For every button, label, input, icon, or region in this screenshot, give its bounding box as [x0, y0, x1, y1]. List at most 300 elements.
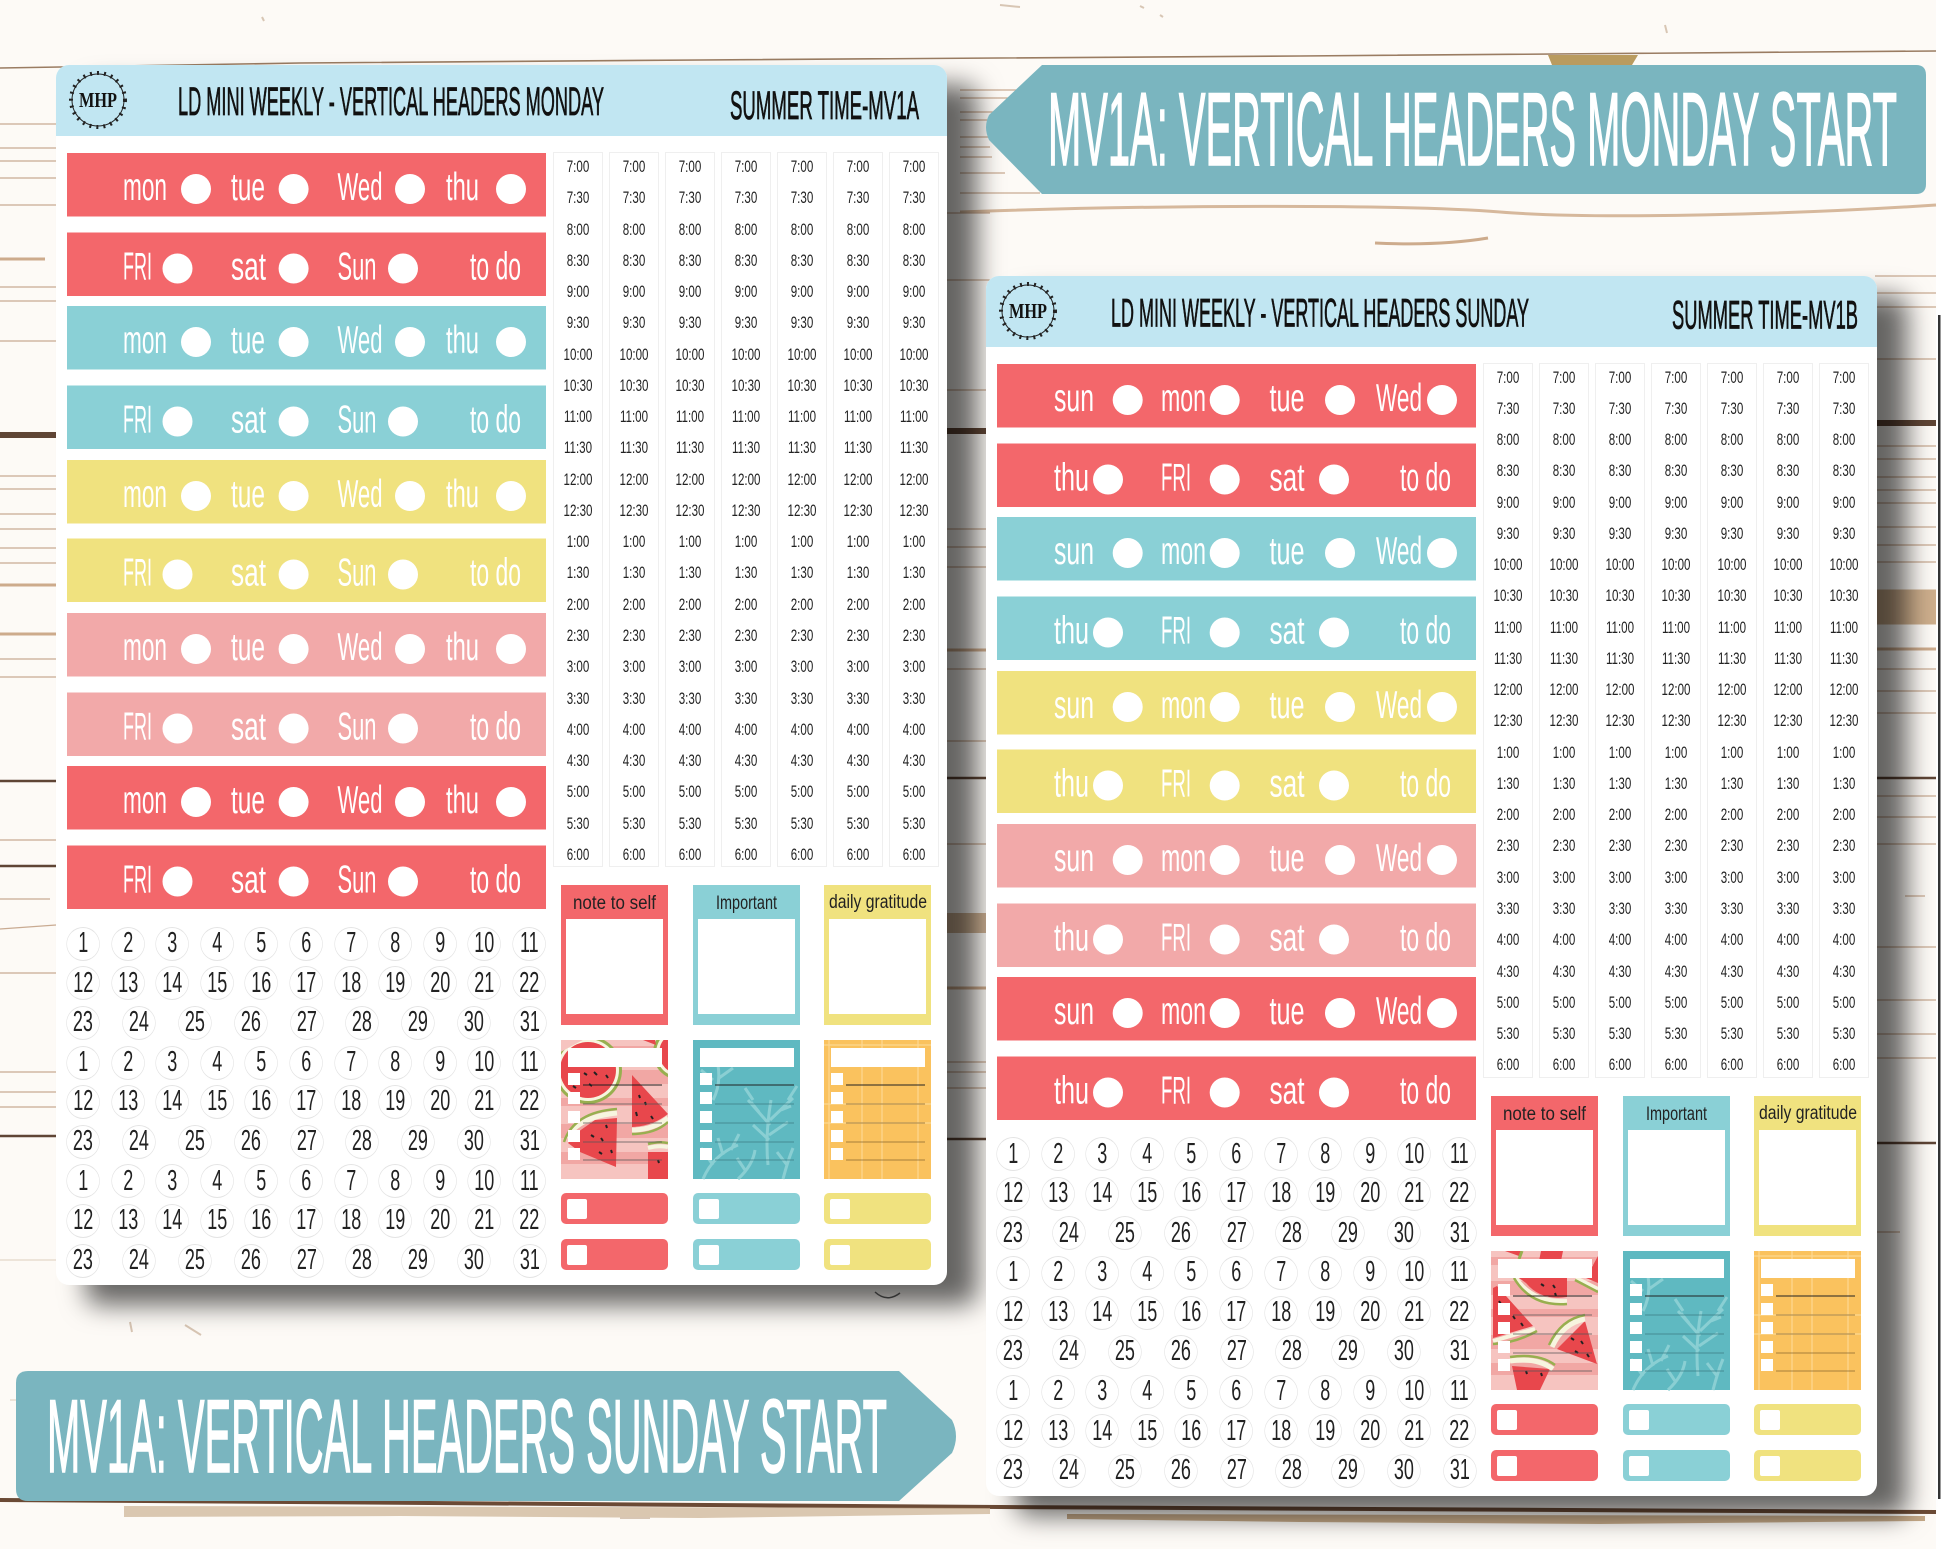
- time column 5: 11:00: [788, 407, 816, 426]
- time column 1: 11:30: [1494, 649, 1522, 668]
- time column 5: 5:30: [791, 814, 813, 833]
- small curved mark under sheet: [875, 1292, 900, 1298]
- time column 3: 9:00: [679, 282, 701, 301]
- date number stickers: 26: [1171, 1335, 1191, 1367]
- time column 3: 7:00: [679, 157, 701, 176]
- date number stickers: 11: [520, 1046, 539, 1078]
- date number stickers: 20: [1360, 1177, 1380, 1209]
- date number stickers: 13: [118, 1085, 138, 1117]
- time column 4: 7:00: [1665, 368, 1687, 386]
- time column 2: 8:30: [1553, 461, 1575, 480]
- time column 1: 8:00: [567, 220, 589, 239]
- time column 7: 9:00: [903, 282, 925, 301]
- time column 5: 7:30: [791, 188, 813, 207]
- time column 1: 7:00: [1497, 368, 1519, 386]
- day bar 4 teal: sat: [231, 398, 266, 442]
- date number stickers: 3: [1097, 1375, 1107, 1407]
- time column 2: 2:00: [1553, 805, 1575, 824]
- time column 1: 5:00: [1497, 993, 1519, 1012]
- time column 6: 10:30: [844, 376, 872, 395]
- date number stickers: 13: [1048, 1296, 1068, 1328]
- time column 3: 8:30: [1609, 461, 1631, 480]
- time column 2: 10:30: [1550, 586, 1578, 605]
- time column 4: 10:30: [732, 376, 760, 395]
- day bar 5 yellow: [67, 460, 546, 524]
- day bar 10 red: thu: [1054, 1069, 1089, 1112]
- time column 7: 3:00: [903, 657, 925, 676]
- date number stickers: 28: [1282, 1335, 1302, 1367]
- time column 7: 1:00: [1833, 743, 1855, 762]
- checklist: teal coral pattern: [1623, 1250, 1730, 1390]
- time column 6: 3:30: [1777, 899, 1799, 918]
- time column 1: 9:00: [567, 282, 589, 301]
- time column 4: 1:30: [1665, 774, 1687, 793]
- time column 1: [553, 152, 603, 867]
- time column 2: 4:00: [623, 720, 645, 739]
- date number stickers: 12: [73, 1204, 93, 1236]
- time column 6: 3:00: [847, 657, 869, 676]
- date number stickers: 17: [1226, 1177, 1246, 1209]
- date number stickers: 4: [212, 1165, 222, 1197]
- time column 7: 6:00: [903, 845, 925, 864]
- time column 7: 12:30: [1830, 711, 1858, 730]
- note box: daily gratitude: [824, 885, 931, 1025]
- time column 6: 7:30: [847, 188, 869, 207]
- day bar 9 red: Wed: [1376, 990, 1422, 1032]
- time column 2: 3:30: [1553, 899, 1575, 918]
- date number stickers: 17: [1226, 1296, 1246, 1328]
- date number stickers: 2: [1053, 1138, 1063, 1170]
- tag stickers row 2: [561, 1239, 931, 1270]
- date number stickers: 14: [1092, 1296, 1112, 1328]
- date number stickers: 29: [1338, 1217, 1358, 1249]
- day bar 7 pink: sun: [1054, 836, 1094, 880]
- time column 6: 2:30: [847, 626, 869, 645]
- time column 4: 3:30: [735, 689, 757, 708]
- date number stickers: 17: [1226, 1415, 1246, 1447]
- time column 7: 8:00: [903, 220, 925, 239]
- day bar 1 red: mon: [123, 166, 167, 209]
- date number stickers: 14: [162, 1085, 182, 1117]
- date number stickers: 3: [1097, 1138, 1107, 1170]
- time column 1: 12:00: [1494, 680, 1522, 699]
- note box: daily gratitude: daily gratitude: [829, 892, 927, 913]
- time column 3: 2:30: [679, 626, 701, 645]
- time column 6: 1:30: [1777, 774, 1799, 793]
- date number stickers: 18: [1271, 1415, 1291, 1447]
- day bar 10 red: [997, 1056, 1476, 1120]
- date number stickers: 15: [1137, 1296, 1157, 1328]
- date number stickers: 20: [430, 967, 450, 999]
- time column 6: 4:00: [847, 720, 869, 739]
- date number stickers: 23: [1003, 1454, 1023, 1486]
- day bar 10 red: [67, 846, 546, 909]
- day bar 4 teal: Sun: [338, 398, 376, 442]
- date number stickers: 18: [341, 1085, 361, 1117]
- date number stickers: 19: [385, 1085, 405, 1117]
- date number stickers: 14: [1092, 1177, 1112, 1209]
- time column 2: 8:00: [1553, 430, 1575, 449]
- time column 4: 12:30: [732, 501, 760, 520]
- date number stickers: 5: [257, 927, 267, 959]
- time column 7: 3:30: [1833, 899, 1855, 918]
- date number stickers: 3: [167, 1165, 177, 1197]
- day bar 4 teal: to do: [1400, 609, 1451, 652]
- time column 2: 9:30: [623, 313, 645, 332]
- date number stickers: 26: [1171, 1217, 1191, 1249]
- date number stickers: 22: [1449, 1415, 1469, 1447]
- time column 1: 7:00: [567, 157, 589, 176]
- date number stickers: 7: [346, 1046, 356, 1078]
- time column 3: 5:30: [1609, 1024, 1631, 1043]
- day bar 6 yellow: to do: [470, 552, 521, 594]
- time column 4: 5:00: [1665, 993, 1687, 1012]
- time column 2: 10:00: [1550, 555, 1578, 574]
- day bar 8 pink: FRI: [1161, 916, 1191, 959]
- time column 5: 10:00: [788, 345, 816, 364]
- time column 6: 1:00: [847, 532, 869, 551]
- day bar 7 pink: [997, 824, 1476, 887]
- time column 5: 2:30: [791, 626, 813, 645]
- date number stickers: 31: [1450, 1335, 1470, 1367]
- day bar 3 teal: Wed: [338, 319, 382, 362]
- time column 4: 6:00: [735, 845, 757, 864]
- date number stickers: 18: [1271, 1177, 1291, 1209]
- date number stickers: 18: [1271, 1296, 1291, 1328]
- day bar 8 pink: sat: [1270, 916, 1305, 959]
- time column 5: 9:30: [1721, 524, 1743, 543]
- date number stickers: 19: [385, 967, 405, 999]
- time column 5: 3:00: [1721, 868, 1743, 887]
- day bar 2 red: [67, 232, 546, 296]
- date number stickers: 14: [162, 967, 182, 999]
- day bar 1 red: tue: [1270, 376, 1304, 420]
- time column 2: 11:30: [620, 438, 648, 457]
- time column 4: 4:30: [1665, 962, 1687, 981]
- date number stickers: 2: [123, 927, 133, 959]
- note box: important: Important: [1646, 1104, 1708, 1124]
- day bar 5 yellow: thu: [446, 473, 479, 516]
- time column 4: 10:30: [1662, 586, 1690, 605]
- time column 5: 2:00: [1721, 805, 1743, 824]
- date number stickers: 21: [475, 967, 495, 999]
- date number stickers: 9: [1365, 1375, 1375, 1407]
- date number stickers: 25: [185, 1006, 205, 1038]
- time column 3: 12:00: [676, 470, 704, 489]
- time column 7: 2:30: [903, 626, 925, 645]
- day bar 6 yellow: [67, 538, 546, 602]
- time column 7: 12:00: [1830, 680, 1858, 699]
- time column 1: 1:00: [1497, 743, 1519, 762]
- time column 4: 10:00: [1662, 555, 1690, 574]
- time column 5: 7:30: [1721, 399, 1743, 418]
- day bar 5 yellow: sun: [1054, 684, 1094, 726]
- time column 6: 8:30: [847, 251, 869, 270]
- logo: MHP wreath: [71, 73, 125, 127]
- date number stickers: 8: [390, 1046, 400, 1078]
- date number stickers: 24: [129, 1125, 149, 1157]
- day bar 5 yellow: [997, 670, 1476, 734]
- day bar 6 yellow: Sun: [338, 552, 376, 594]
- time column 6: 5:30: [1777, 1024, 1799, 1043]
- day bar 6 yellow: sat: [1270, 762, 1305, 805]
- date number stickers: 5: [1187, 1256, 1197, 1288]
- note box: note to self: note to self: [573, 893, 657, 914]
- time column 3: 11:30: [676, 438, 704, 457]
- panel: sheet MV1B (Sunday start): [986, 276, 1877, 1496]
- time column 5: 2:30: [1721, 836, 1743, 855]
- time column 3: 3:00: [1609, 868, 1631, 887]
- day bar 10 red: FRI: [123, 858, 152, 902]
- time column 3: 1:30: [679, 563, 701, 582]
- time column 6: [833, 152, 883, 867]
- time column 6: 5:00: [847, 782, 869, 801]
- time column 4: 11:00: [1662, 618, 1690, 637]
- time column 3: 3:30: [679, 689, 701, 708]
- time column 6: 4:30: [1777, 962, 1799, 981]
- date number stickers: 16: [252, 1085, 272, 1117]
- time column 7: 10:00: [1830, 555, 1858, 574]
- date number stickers: 21: [1405, 1296, 1425, 1328]
- date number stickers: 24: [1059, 1454, 1079, 1486]
- time column 5: 1:00: [791, 532, 813, 551]
- time column 5: 4:00: [1721, 930, 1743, 949]
- day bar 7 pink: Wed: [338, 626, 382, 669]
- day bar 5 yellow: Wed: [338, 473, 382, 516]
- day bar 2 red: thu: [1054, 456, 1089, 499]
- day bar 1 red: sun: [1054, 376, 1094, 420]
- time column 7: 5:00: [1833, 993, 1855, 1012]
- time column 1: 3:00: [567, 657, 589, 676]
- time column 3: 9:00: [1609, 493, 1631, 512]
- day bar 8 pink: [67, 692, 546, 756]
- time column 3: [665, 152, 715, 867]
- time column 1: 3:30: [567, 689, 589, 708]
- date number stickers: 19: [1315, 1177, 1335, 1209]
- date number stickers: 5: [257, 1165, 267, 1197]
- time column 5: 1:30: [1721, 774, 1743, 793]
- time column 1: 4:00: [567, 720, 589, 739]
- time column 5: 5:00: [791, 782, 813, 801]
- time column 2: 9:00: [623, 282, 645, 301]
- time column 4: 2:00: [1665, 805, 1687, 824]
- time column 2: 5:00: [623, 782, 645, 801]
- time column 1: 4:30: [1497, 962, 1519, 981]
- time column 3: 11:30: [1606, 649, 1634, 668]
- date number stickers: 4: [1142, 1256, 1152, 1288]
- time column 5: 4:30: [791, 751, 813, 770]
- day bar 6 yellow: FRI: [1161, 762, 1191, 805]
- day bar 1 red: thu: [446, 166, 479, 209]
- time column 7: 12:30: [900, 501, 928, 520]
- time column 2: 12:30: [1550, 711, 1578, 730]
- time column 4: 12:00: [732, 470, 760, 489]
- time column 7: 9:00: [1833, 493, 1855, 512]
- time column 6: 2:00: [847, 595, 869, 614]
- time column 3: 3:30: [1609, 899, 1631, 918]
- date number stickers: 11: [1450, 1375, 1469, 1407]
- time column 6: 8:30: [1777, 461, 1799, 480]
- date number stickers: 31: [1450, 1217, 1470, 1249]
- day bar 5 yellow: mon: [1161, 684, 1206, 726]
- day bar 8 pink: [997, 903, 1476, 966]
- day bar 2 red: Sun: [338, 246, 376, 288]
- time column 2: 2:30: [623, 626, 645, 645]
- time column 7: 3:00: [1833, 868, 1855, 887]
- time column 4: 2:30: [735, 626, 757, 645]
- date number stickers: 31: [520, 1244, 540, 1276]
- time column 1: 7:30: [567, 188, 589, 207]
- date number stickers: 29: [408, 1006, 428, 1038]
- time column 5: 10:30: [788, 376, 816, 395]
- time column 5: 11:30: [788, 438, 816, 457]
- checklist: teal coral pattern: [693, 1040, 800, 1179]
- date number stickers: 22: [1449, 1177, 1469, 1209]
- time column 3: 4:00: [1609, 930, 1631, 949]
- day bar 7 pink: tue: [231, 626, 265, 669]
- date number stickers: 1: [78, 927, 88, 959]
- date number stickers: 1: [78, 1046, 88, 1078]
- date number stickers: 2: [1053, 1256, 1063, 1288]
- day bar 4 teal: FRI: [123, 398, 152, 442]
- checklist overlay: watermelon: [568, 1048, 662, 1160]
- time column 6: 1:00: [1777, 743, 1799, 762]
- date number stickers: 17: [296, 1085, 316, 1117]
- time column 3: 5:30: [679, 814, 701, 833]
- time column 6: 9:00: [1777, 493, 1799, 512]
- date number stickers: 25: [1115, 1335, 1135, 1367]
- time column 7: 10:30: [1830, 586, 1858, 605]
- day bar 3 teal: tue: [231, 319, 265, 362]
- time column 3: 12:30: [676, 501, 704, 520]
- time column 5: [777, 152, 827, 867]
- sheet artwork: header text, day bars, note boxes: [997, 282, 1861, 1481]
- date number stickers: 21: [1405, 1177, 1425, 1209]
- time column 1: 2:30: [1497, 836, 1519, 855]
- time column 3: 3:00: [679, 657, 701, 676]
- time column 4: 9:30: [735, 313, 757, 332]
- time column 5: 1:00: [1721, 743, 1743, 762]
- day bar 1 red: tue: [231, 166, 265, 209]
- date number stickers: 12: [1003, 1177, 1023, 1209]
- date number stickers: 30: [1394, 1335, 1414, 1367]
- date number stickers: 26: [1171, 1454, 1191, 1486]
- date number stickers: 3: [167, 1046, 177, 1078]
- date number stickers: 9: [435, 1165, 445, 1197]
- date number stickers: 21: [1405, 1415, 1425, 1447]
- day bar 3 teal: tue: [1270, 530, 1304, 572]
- time column 3: 9:30: [1609, 524, 1631, 543]
- day bar 7 pink: mon: [123, 626, 167, 669]
- date number stickers: 30: [464, 1244, 484, 1276]
- time column 3: 8:00: [679, 220, 701, 239]
- time column 7: 5:00: [903, 782, 925, 801]
- date number stickers: 1: [1008, 1138, 1018, 1170]
- day bar 4 teal: sat: [1270, 609, 1305, 652]
- time column 7: 11:30: [900, 438, 928, 457]
- time column 5: 12:30: [788, 501, 816, 520]
- date number stickers: 7: [346, 927, 356, 959]
- time column 1: 5:00: [567, 782, 589, 801]
- time column 4: 8:30: [735, 251, 757, 270]
- time column 4: 3:00: [735, 657, 757, 676]
- time column 6: 11:30: [1774, 649, 1802, 668]
- date number stickers: 27: [296, 1006, 316, 1038]
- time column 3: 4:30: [1609, 962, 1631, 981]
- time column 2: 12:00: [1550, 680, 1578, 699]
- time column 7: 12:00: [900, 470, 928, 489]
- time column 3: 5:00: [1609, 993, 1631, 1012]
- day bar 9 red: [67, 766, 546, 830]
- time column 6: 12:00: [844, 470, 872, 489]
- day bar 4 teal: [997, 596, 1476, 660]
- time column 4: 5:00: [735, 782, 757, 801]
- date number stickers: 25: [185, 1244, 205, 1276]
- day bar 9 red: tue: [1270, 990, 1304, 1032]
- time column 7: 4:30: [1833, 962, 1855, 981]
- note box: note to self: note to self: [1503, 1104, 1587, 1124]
- date number stickers: 11: [520, 927, 539, 959]
- time column 2: 7:30: [623, 188, 645, 207]
- time column 1: 12:00: [564, 470, 592, 489]
- day bar 5 yellow: Wed: [1376, 684, 1422, 726]
- time column 7: 3:30: [903, 689, 925, 708]
- time column 2: 1:00: [1553, 743, 1575, 762]
- time column 3: 11:00: [1606, 618, 1634, 637]
- date number stickers: 15: [1137, 1415, 1157, 1447]
- time column 3: 8:30: [679, 251, 701, 270]
- time column 6: 9:30: [1777, 524, 1799, 543]
- time column 1: 6:00: [1497, 1055, 1519, 1074]
- time column 7: 2:00: [903, 595, 925, 614]
- time column 4: 10:00: [732, 345, 760, 364]
- note box: daily gratitude: daily gratitude: [1759, 1102, 1857, 1124]
- time column 6: 8:00: [1777, 430, 1799, 449]
- date number stickers: 16: [252, 967, 272, 999]
- date number stickers: 19: [1315, 1415, 1335, 1447]
- time column 7: 7:00: [903, 157, 925, 176]
- date number stickers: 28: [1282, 1217, 1302, 1249]
- day bar 8 pink: thu: [1054, 916, 1089, 959]
- time column 3: 10:30: [1606, 586, 1634, 605]
- date number stickers: 28: [1282, 1454, 1302, 1486]
- date number stickers: 3: [1097, 1256, 1107, 1288]
- time column 6: 1:30: [847, 563, 869, 582]
- time column 4: 1:00: [1665, 743, 1687, 762]
- time column 6: 12:30: [1774, 711, 1802, 730]
- day bar 7 pink: tue: [1270, 836, 1304, 880]
- time column 4: 4:00: [1665, 930, 1687, 949]
- time column 2: 1:00: [623, 532, 645, 551]
- day bar 3 teal: Wed: [1376, 530, 1422, 572]
- time column 7: 11:00: [900, 407, 928, 426]
- date number stickers: 27: [296, 1244, 316, 1276]
- time column 2: 12:30: [620, 501, 648, 520]
- time column 2: 11:00: [1550, 618, 1578, 637]
- date number stickers: 15: [1137, 1177, 1157, 1209]
- time column 2: 2:00: [623, 595, 645, 614]
- time column 4: 11:30: [1662, 649, 1690, 668]
- tag stickers row 1: [1491, 1404, 1861, 1434]
- time column 5: 9:30: [791, 313, 813, 332]
- time column 3: 5:00: [679, 782, 701, 801]
- time column 5: [1707, 362, 1757, 1078]
- tag stickers row 1: [561, 1193, 931, 1224]
- time column 6: 11:30: [844, 438, 872, 457]
- time column 4: 12:00: [1662, 680, 1690, 699]
- time column 3: 1:00: [1609, 743, 1631, 762]
- sheet header band: [56, 65, 947, 136]
